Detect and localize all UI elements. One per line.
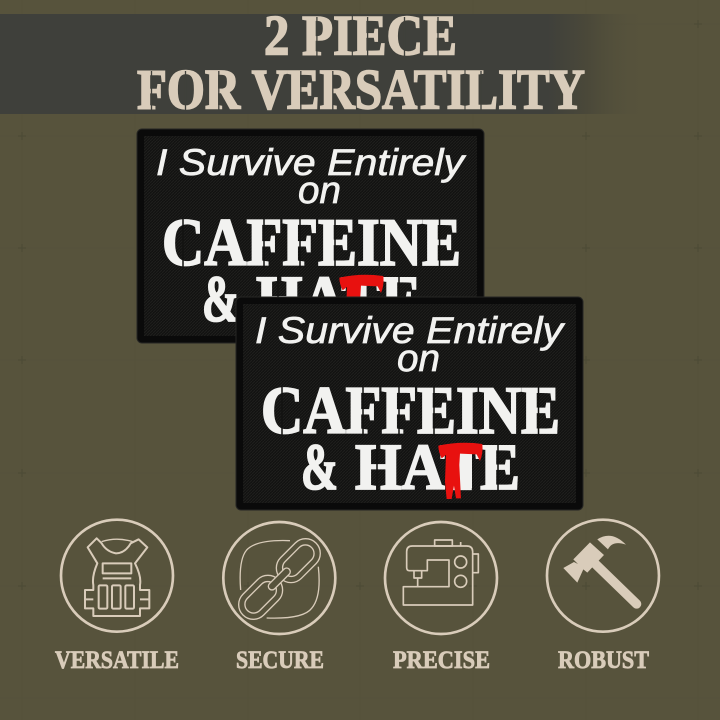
patch: front: HATE (355, 431, 520, 504)
patch: front: I Survive Entirely (255, 310, 566, 351)
icon: versatile vest (61, 520, 173, 632)
labels: ROBUST (558, 647, 649, 674)
labels: VERSATILE (55, 647, 179, 674)
icon: blood drip on T (438, 443, 483, 499)
icon: secure chain (223, 522, 335, 634)
patch: back: on (298, 170, 341, 212)
icon: precise sewing machine (385, 522, 497, 634)
title: FOR VERSATILITY (137, 58, 585, 122)
patch: front: & (301, 431, 338, 504)
patch: front: CAFFEINE (261, 372, 560, 448)
title banner (0, 14, 720, 114)
title (137, 4, 585, 122)
labels: SECURE (236, 647, 324, 674)
title: 2 PIECE (264, 4, 457, 68)
patch: back: I Survive Entirely (156, 142, 467, 183)
patch: back: & (202, 263, 239, 336)
labels (55, 647, 649, 674)
patch: front: on (397, 338, 440, 380)
patch: back (137, 129, 484, 343)
icon: robust hammer (547, 520, 659, 632)
patch: back: CAFFEINE (162, 204, 461, 280)
labels: PRECISE (393, 647, 490, 674)
patch: back: HATE (256, 263, 421, 336)
patch: front (236, 297, 583, 510)
